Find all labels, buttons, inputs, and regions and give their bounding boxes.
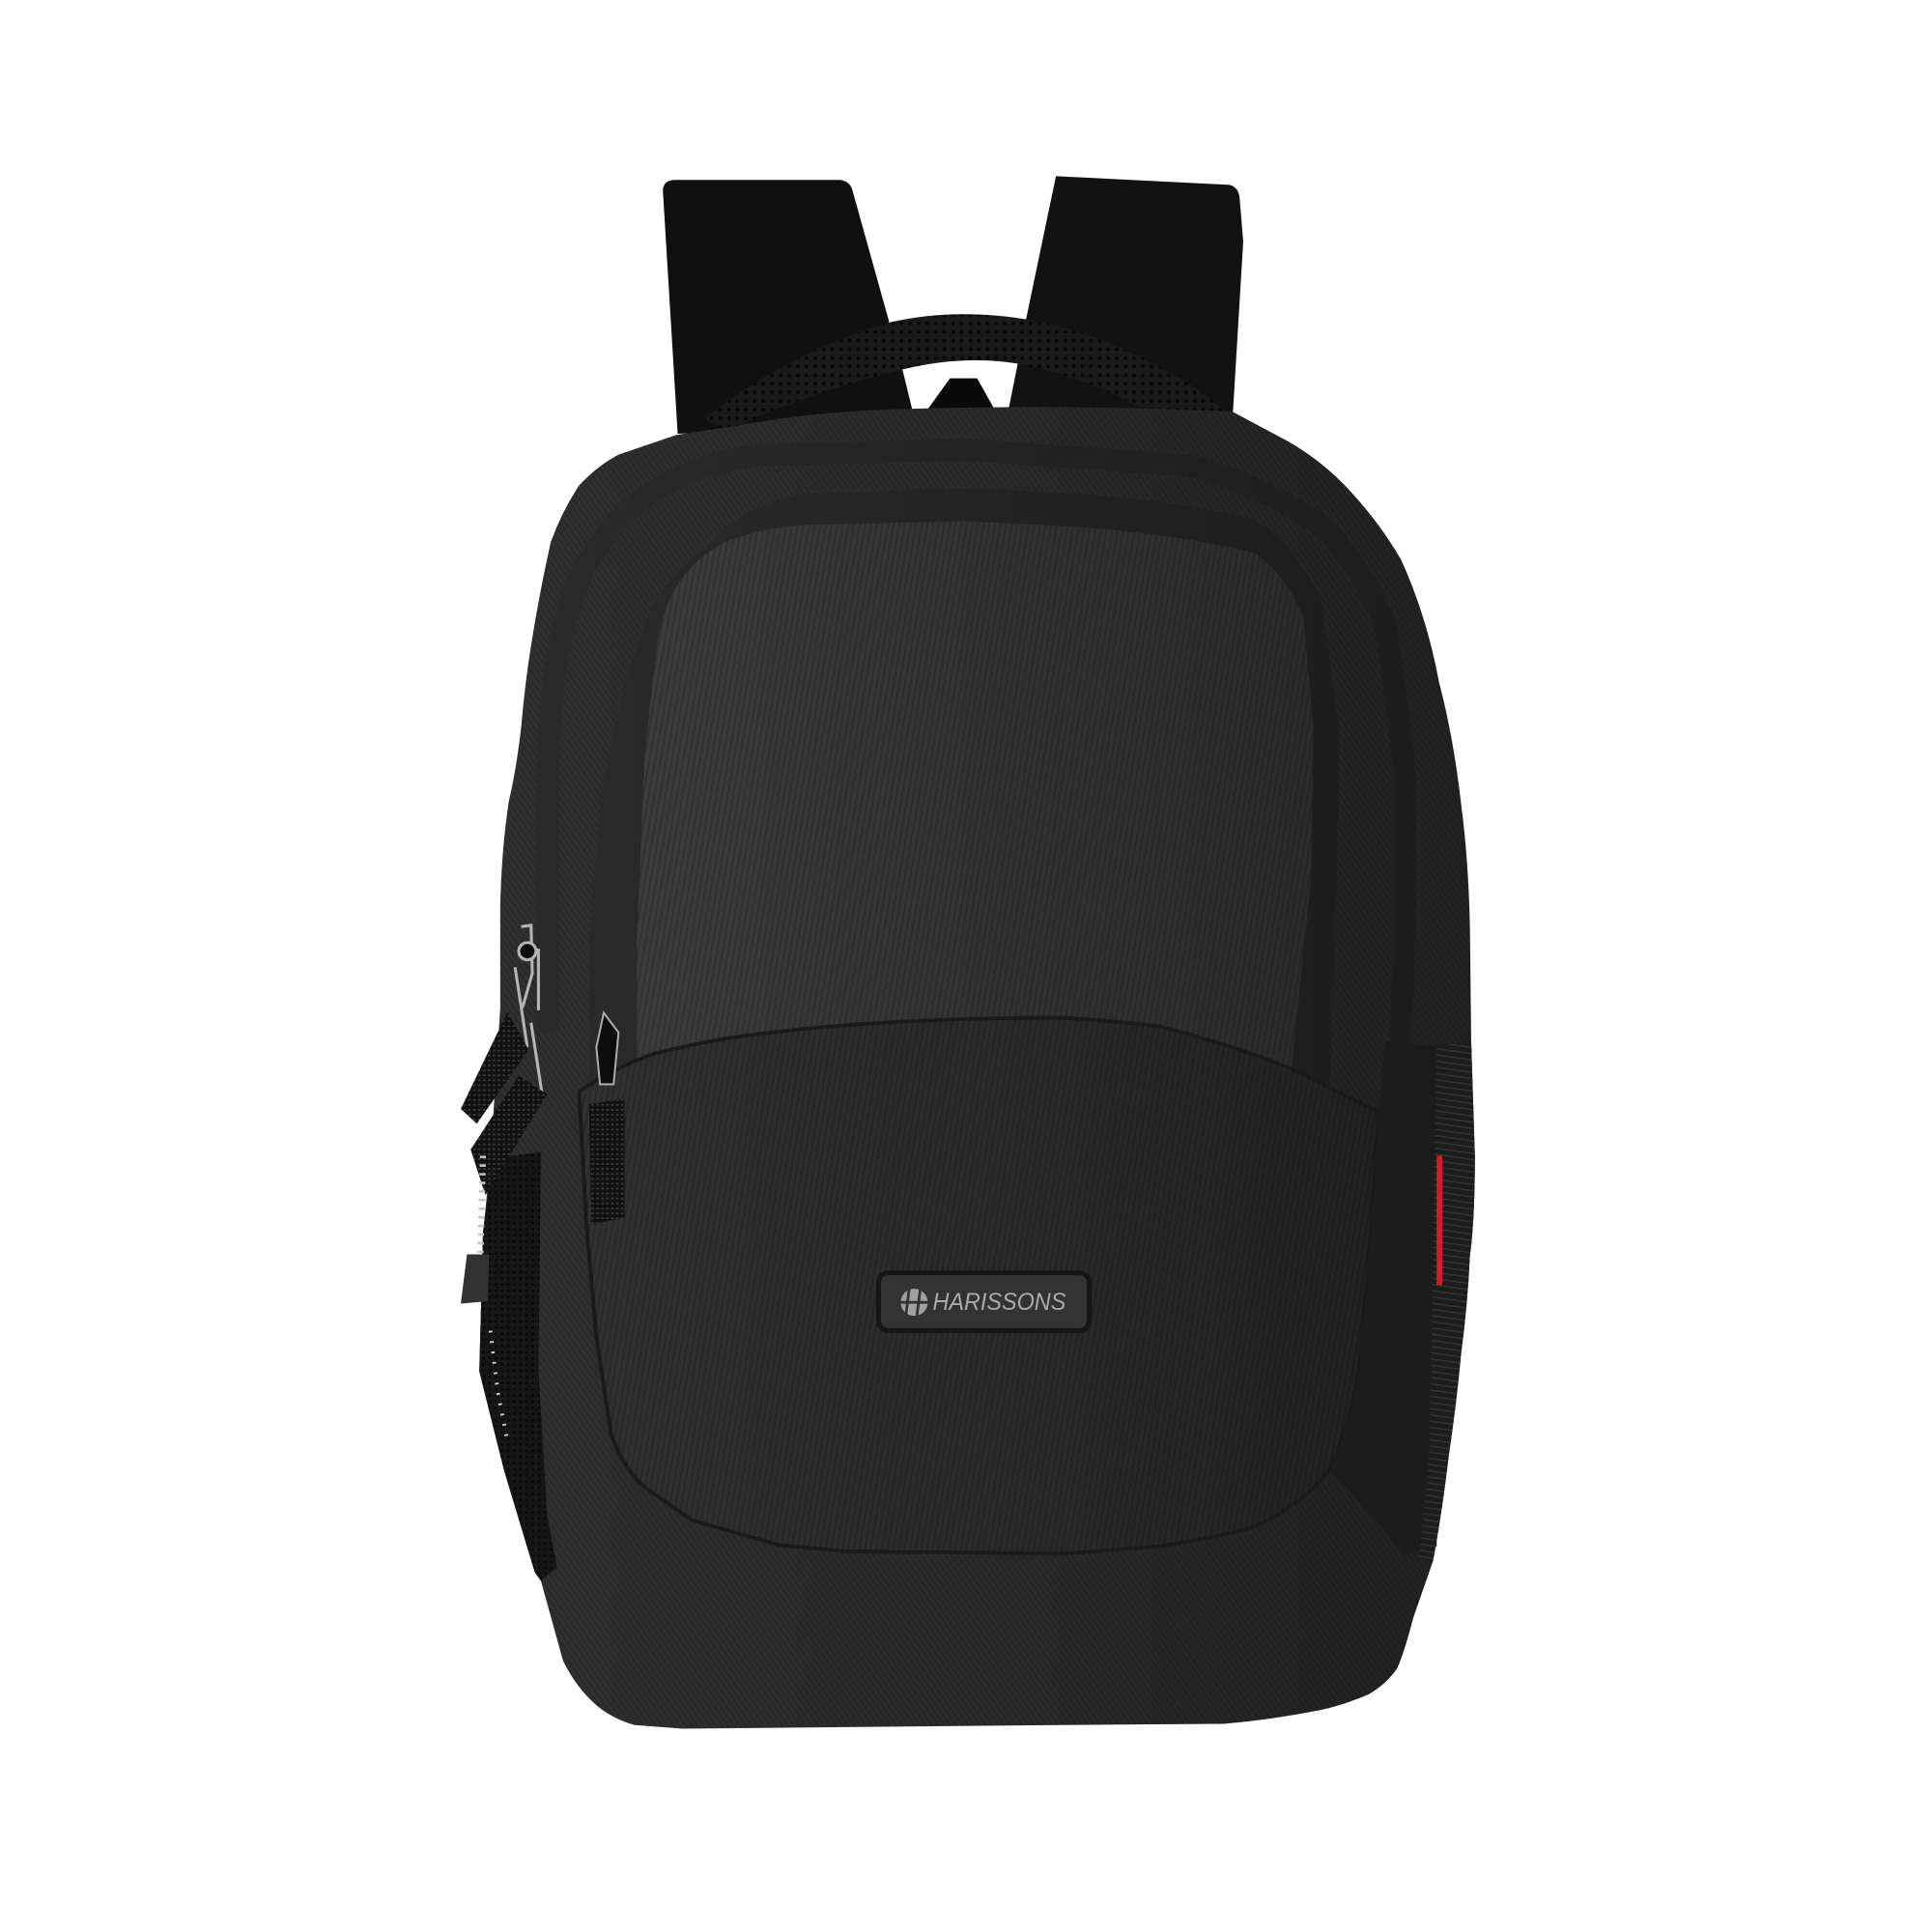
zipper metal sliders [515,925,542,1094]
mesh fabric [479,1152,557,1580]
badge patch [878,1273,1090,1331]
upper panel fabric [637,522,1314,1072]
upper panel piping band [589,488,1339,1086]
backpack body [479,407,1475,1729]
dark side panel [1329,1041,1436,1555]
mesh highlights [491,1331,508,1441]
left shoulder strap [663,180,918,434]
brand name: HARISSONS [933,1289,1066,1316]
slider [596,1012,618,1084]
red stripe [1436,1155,1442,1285]
zipper pull center [589,1012,625,1225]
handle loop [927,379,994,409]
body fabric texture [479,407,1475,1729]
brand logo [899,1288,929,1318]
top handle [705,314,1235,434]
zipper cord teeth [480,1155,483,1254]
fabric tab [589,1099,625,1225]
right shoulder strap [1005,176,1243,425]
right side panel with red stripe [1329,1041,1475,1561]
fabric pull tab lower [470,1076,547,1195]
fabric pull tab upper [461,1011,528,1123]
handle arc [705,314,1235,434]
upper front panel [637,522,1314,1072]
ribbed side strip [1419,1041,1475,1561]
lower pocket fabric [579,1018,1378,1553]
rubber end [461,1254,489,1303]
zipper pulls left [461,925,547,1303]
lower front pocket [579,1018,1378,1553]
outer gusset piping [547,450,1405,1037]
handle opening [902,360,1018,412]
side mesh pocket [479,1152,557,1580]
brand badge [878,1273,1090,1331]
